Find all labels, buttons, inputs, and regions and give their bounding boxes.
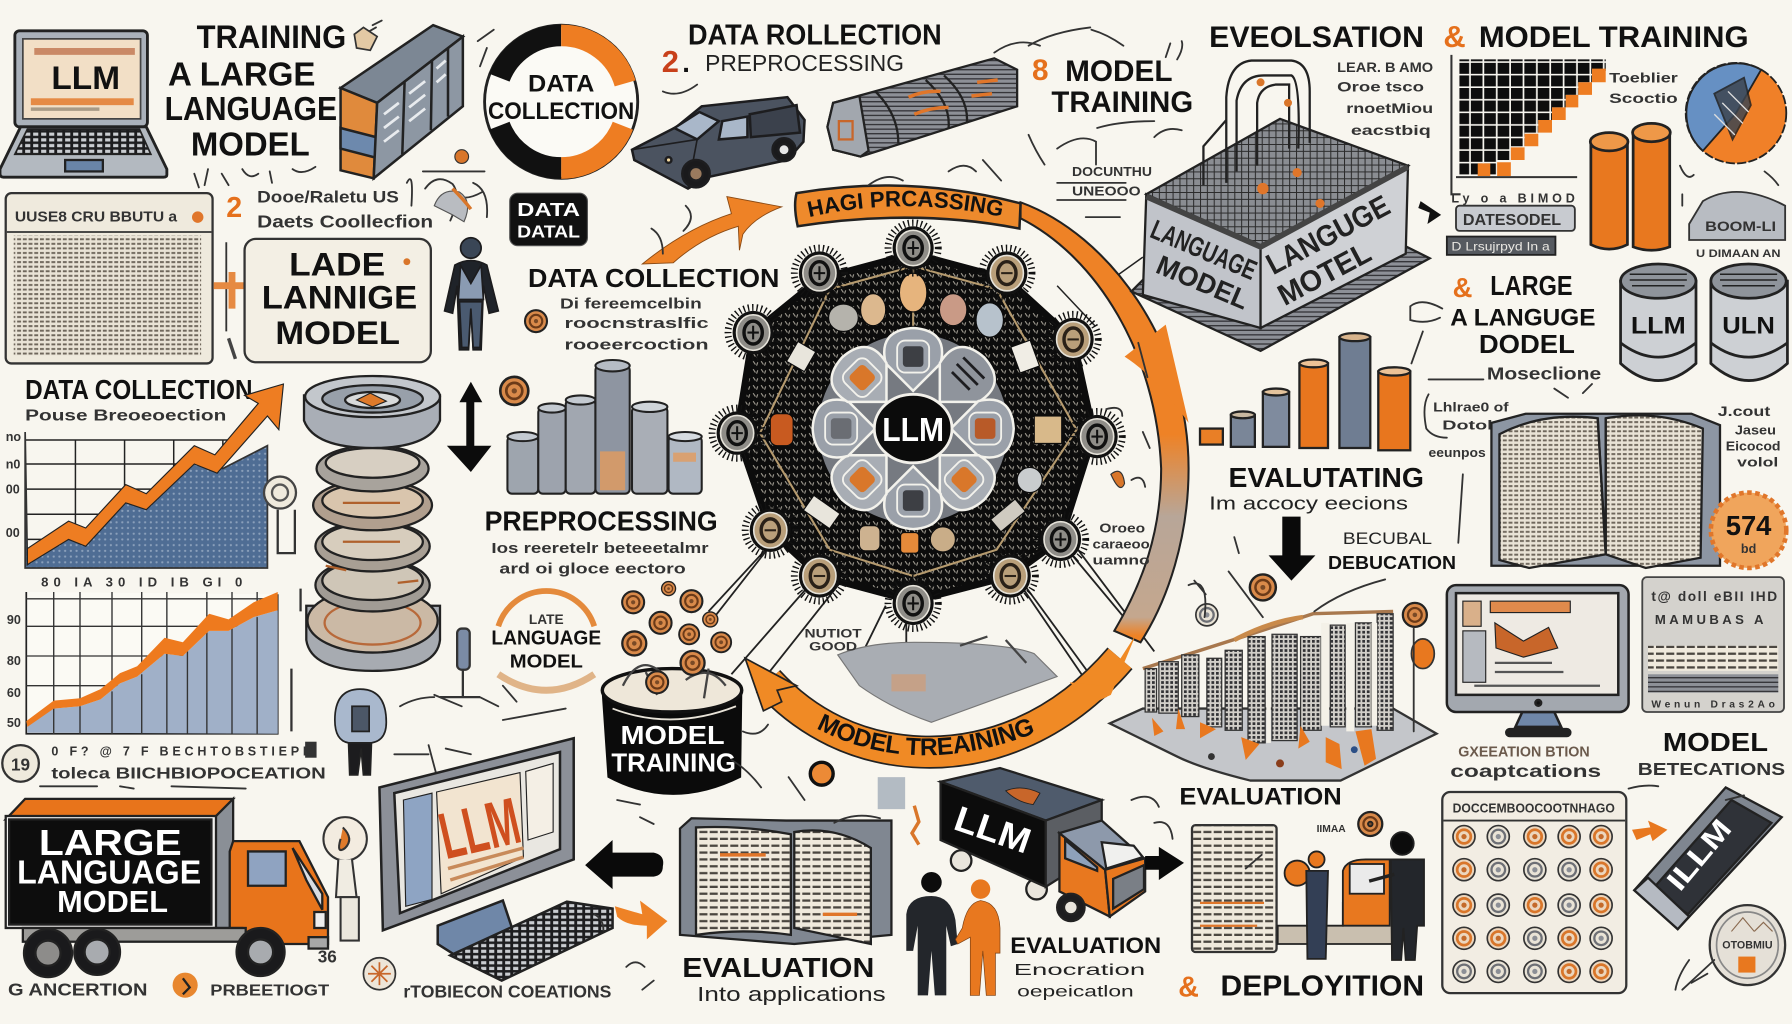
text block: model betecations (1638, 727, 1785, 779)
icon: delivery truck large language model: LARGE (39, 822, 182, 863)
icon: dark van (632, 97, 805, 189)
chart: rising bars with orange band: 80 (7, 654, 21, 668)
small scribble notes: top area: 2 (226, 192, 242, 224)
title: training a large language model: A LARGE (168, 57, 315, 94)
banner: hagi prcassing: HAGI PRCASSING (808, 190, 1002, 217)
diagram: central LLM network hub (712, 223, 1122, 629)
spoke medallions (770, 273, 1062, 553)
small scribble notes: top area (194, 21, 494, 231)
bottom-left caption row: PRBEETIOGT (210, 982, 329, 999)
panel: grey chart paper: Wenun Dras2Ao (1651, 699, 1775, 710)
scribbles: chart footnotes (2, 686, 566, 789)
chart: rising bars with orange band: 50 (7, 716, 21, 730)
heading: data collection above chart: Pouse Breoeoection (25, 408, 226, 425)
badge: round seal bottom-right: OTOBMIU (1722, 940, 1773, 952)
icon: server fence on platform (1110, 611, 1437, 781)
panel: lade lannige model box (245, 239, 431, 362)
arrow: small orange arrow to drive (1632, 821, 1667, 841)
icon: delivery truck large language model: LANGUAGE (17, 854, 201, 891)
panel: grey chart paper: t@ doll eBII IHD (1651, 589, 1777, 604)
heading: data rollection preprocessing (662, 20, 942, 79)
chart: data collection donut: COLLECTION (488, 98, 634, 125)
heading: deployition: & (1178, 972, 1199, 1004)
icon: language model machine box: LANGUGE (1261, 189, 1396, 282)
text block: evaluating: EVALUTATING (1229, 462, 1424, 493)
small note: left of open book: Dotol (1442, 418, 1493, 433)
icon: grey basin under hub (805, 627, 1057, 722)
small note: far-right book side: volol (1737, 454, 1778, 469)
small text: right of arches: eacstbiq (1351, 123, 1431, 139)
scribble decorations: ink marks across the page (594, 27, 1744, 990)
text block: preprocessing (485, 505, 718, 578)
heading: evaluation and model training: EVEOLSATION (1209, 21, 1424, 54)
network links around the hub (709, 257, 1154, 697)
chart: rising area chart with orange arrow (6, 384, 283, 589)
small text: right of arches (1337, 60, 1433, 139)
heading: data rollection preprocessing: . (682, 47, 690, 78)
icon: delivery truck large language model (6, 799, 328, 977)
small text: right of arches: rnoetMiou (1346, 101, 1433, 117)
small notes right of hub: Oroeo (1099, 521, 1145, 536)
icon: language model machine box: LANGUAGE (1146, 214, 1261, 286)
arrow: black evaluation down arrow (1269, 517, 1315, 581)
icon: workers with orange truck (1278, 812, 1424, 960)
text block: data collection centre-left (500, 263, 779, 405)
title: training a large language model: LANGUAGE (165, 91, 337, 128)
text block: large language model right: & (1453, 272, 1472, 303)
small notes right of hub: caraeoo (1093, 537, 1150, 552)
scribble decorations: ink marks across the page: UNEOOO (1072, 184, 1141, 198)
heading: evaluation and model training: & (1443, 19, 1466, 54)
small note: far-right book side (1718, 404, 1781, 469)
badge: round seal bottom-right (1675, 905, 1785, 990)
icons: orange and grey balls around fence (1194, 571, 1434, 731)
icon: grey basin under hub: NUTIOT (805, 627, 863, 641)
small notes right of hub (1093, 343, 1150, 568)
icon: magnifying lamp near monitor (323, 817, 367, 941)
small scribble notes: top area: Daets Coollecfion (257, 211, 433, 231)
arrow: black down arrow (447, 382, 491, 472)
icon: compressed data roll (827, 58, 1017, 157)
label: data tag: DATAL (517, 222, 580, 242)
panel: lade lannige model box: LADE (289, 246, 385, 282)
heading: data collection above chart: DATA COLLECTION (25, 374, 253, 405)
chart: rising bars with orange band: 60 (7, 686, 21, 700)
arrow: model training curved band: MODEL TREAINING (818, 714, 1034, 756)
title: training a large language model: MODEL (191, 126, 310, 163)
panel: laptop with LLM screen (0, 31, 167, 177)
chart: data collection donut (485, 25, 638, 178)
chart: rising area chart with orange arrow: no (6, 430, 21, 444)
heading: data rollection preprocessing: 2 (662, 44, 679, 79)
icon: open book (1491, 414, 1720, 568)
small text: chart note: Toeblier (1609, 70, 1678, 86)
title: training a large language model: TRAINING (197, 19, 346, 55)
text block: evaluating (1209, 462, 1424, 514)
chart: rising area chart with orange arrow: 80 IA 30 ID IB GI 0 (41, 574, 242, 589)
label: data tag (510, 193, 587, 246)
icon: magnifier (264, 477, 296, 553)
icon: language model machine box: MODEL (1152, 249, 1253, 315)
icon: lab pedestal (291, 589, 480, 757)
text block: becubal debucation: BECUBAL (1343, 529, 1432, 548)
text block: evaluation into applications (682, 952, 886, 1006)
panel: coin calendar grid (1442, 792, 1626, 993)
small text: right of arches: Oroe tsco (1337, 79, 1424, 95)
icon: small archive house (1680, 166, 1785, 260)
arrow: model training curved band (744, 638, 1134, 769)
label: language model circle: LATE (529, 612, 564, 627)
text block: evaluation enocration: Enocration (1014, 962, 1145, 979)
text block: evaluation enocration (1010, 933, 1161, 1001)
small note: left of open book (1424, 394, 1509, 543)
icon: bucket with coins: MODEL (621, 720, 725, 750)
text block: large language model right (1410, 270, 1601, 398)
text block: becubal debucation (1328, 529, 1456, 573)
text block: coaptcations caption: GXEEATION BTION (1458, 745, 1590, 761)
label: language model circle: MODEL (510, 650, 583, 671)
panel: grey chart paper (1642, 577, 1784, 712)
chart: rising area chart with orange arrow: 00 (6, 526, 20, 540)
chart: blue orange pie gear (1686, 63, 1786, 163)
icon: small archive house: U DIMAAN AN (1696, 248, 1781, 260)
connector: window to model box (214, 242, 246, 359)
icon: stacked model books (1418, 201, 1575, 255)
text block: data collection centre-left: rooeercoction (565, 338, 709, 354)
panel: laptop with LLM screen: LLM (51, 60, 120, 96)
bottom-left caption row (8, 946, 611, 1002)
icon: small archive house: BOOM-LI (1705, 219, 1776, 235)
badge: orange seal: 574 (1726, 510, 1772, 541)
small text: chart note: Scoctio (1609, 91, 1678, 107)
chart: orange cylinders (1590, 123, 1670, 250)
icon: person in overalls (445, 238, 498, 350)
text block: data collection centre-left: roocnstraslfic (565, 316, 709, 332)
chart: data collection donut: DATA (528, 70, 594, 97)
icon: LLM delivery truck: LLM (949, 798, 1036, 861)
icon: desktop monitor (1447, 585, 1629, 736)
heading: model training step: TRAINING (1051, 86, 1193, 119)
chart: rising area chart with orange arrow: 00 (6, 483, 20, 497)
icon: workers with orange truck: IIMAA (1317, 824, 1346, 835)
heading: data rollection preprocessing: DATA ROLLECTION (688, 20, 942, 52)
icon: LLM cans: LLM (1631, 313, 1686, 340)
text block: preprocessing: ard oi gloce eectoro (499, 562, 686, 578)
scribble decorations: ink marks across the page: DOCUNTHU (1072, 165, 1152, 179)
icon: language model machine box (1131, 61, 1430, 351)
icon: isometric data block (341, 25, 463, 178)
text block: large language model right: LARGE (1490, 270, 1573, 301)
heading: evaluation lower centre: EVALUATION (1179, 784, 1342, 811)
small note: far-right book side: J.cout (1718, 404, 1771, 419)
small notes right of hub: uamno (1093, 553, 1150, 568)
bottom-left caption row: 36 (318, 946, 337, 966)
title: training a large language model (165, 19, 346, 163)
small note: far-right book side: Jaseu (1735, 422, 1776, 437)
small text: chart note (1609, 70, 1678, 107)
panel: grey chart paper: MAMUBAS A (1655, 612, 1764, 627)
small note: left of open book: eeunpos (1429, 445, 1486, 460)
panel: lade lannige model box: MODEL (275, 315, 400, 351)
scribbles: chart footnotes: 19 (11, 754, 30, 774)
small scribble notes: top area: Dooe/Raletu US (257, 187, 399, 206)
panel: document (1192, 825, 1277, 952)
network strands (760, 248, 1077, 576)
text block: data collection centre-left: Di fereemcelbin (560, 297, 702, 313)
banner: hagi prcassing (794, 184, 1022, 230)
text block: model betecations: BETECATIONS (1638, 759, 1785, 779)
text block: evaluation enocration: EVALUATION (1010, 933, 1161, 958)
heading: deployition: DEPLOYITION (1221, 970, 1424, 1002)
text block: evaluation into applications: EVALUATION (682, 952, 874, 983)
chart: rising bars with orange band: 90 (7, 613, 21, 627)
panel: coin calendar grid: DOCCEMBOOCOOTNHAGO (1453, 802, 1615, 816)
chart: grey data cylinders (507, 360, 702, 494)
text block: data collection centre-left: DATA COLLECTION (528, 263, 779, 293)
icon: stacked model books: DATESODEL (1463, 212, 1561, 229)
chart: staircase grid: Ly o a BIMOD (1451, 191, 1575, 205)
icon: LLM delivery truck (941, 768, 1145, 921)
arrow: upper-left orange arrow into banner (642, 197, 782, 264)
text block: evaluating: Im accocy eecions (1209, 493, 1408, 514)
text block: becubal debucation: DEBUCATION (1328, 552, 1456, 573)
text block: preprocessing: Ios reeretelr beteeetalmr (491, 541, 709, 557)
heading: model training step: MODEL (1065, 55, 1173, 88)
icon: LLM usb drive: ILLM (1661, 813, 1738, 897)
heading: data rollection preprocessing: PREPROCESSING (705, 50, 904, 76)
icon: bucket with coins: TRAINING (611, 747, 736, 777)
icon: stacked model books: D Lrsujrpyd In a (1451, 239, 1550, 253)
panel: lade lannige model box: LANNIGE (262, 280, 417, 316)
arrow: black left arrow (585, 840, 663, 889)
icon: language model machine box: MOTEL (1272, 236, 1377, 312)
icon: delivery truck large language model: MODEL (57, 884, 168, 919)
heading: evaluation and model training (1209, 19, 1749, 54)
badge: orange seal (1711, 493, 1786, 568)
icon: monitor showing LLM: LLM (433, 785, 527, 874)
label: data tag: DATA (517, 199, 580, 220)
icon: bucket with coins (602, 582, 742, 794)
icon: open book bottom (680, 818, 891, 944)
label: language model circle: LANGUAGE (491, 628, 601, 650)
icon: LLM usb drive (1634, 787, 1782, 929)
panel: browser text window: UUSE8 CRU BBUTU a (15, 210, 178, 226)
chart: evaluation bars (1200, 333, 1410, 450)
label: language model circle (491, 591, 601, 690)
icon: LLM cans: ULN (1722, 313, 1775, 340)
panel: browser text window (6, 193, 213, 363)
chart: rising area chart with orange arrow: n0 (6, 458, 20, 472)
text block: large language model right: Moseclione (1487, 363, 1601, 383)
heading: data collection above chart (25, 374, 253, 425)
heading: model training step: 8 (1032, 54, 1049, 87)
icon: grey basin under hub: GOOD (809, 639, 858, 653)
small text: right of arches: LEAR. B AMO (1337, 60, 1433, 75)
icon: LLM cans (1621, 264, 1787, 381)
arrow: small orange right arrow (615, 901, 667, 939)
icon: two people (906, 872, 1000, 995)
text block: evaluation into applications: Into applications (697, 983, 886, 1006)
scribbles: chart footnotes: toleca BIICHBIOPOCEATION (51, 765, 326, 782)
bottom-left caption row: G ANCERTION (8, 979, 147, 999)
badge: orange seal: bd (1741, 542, 1756, 556)
arrow: small black right arrow by truck (1145, 847, 1184, 880)
text block: coaptcations caption (1450, 745, 1601, 781)
text block: coaptcations caption: coaptcations (1450, 761, 1601, 781)
scribbles: chart footnotes: 0 F? @ 7 F BECHTOBSTIEPR (51, 744, 312, 758)
text block: preprocessing: PREPROCESSING (485, 505, 718, 536)
text block: large language model right: DODEL (1479, 329, 1575, 359)
small note: left of open book: Lhlrae0 of (1433, 399, 1509, 414)
perimeter nodes (712, 223, 1122, 629)
icon: small person in blue (335, 689, 386, 775)
arrow: big orange cycle arc (1021, 202, 1189, 642)
inner flower: LLM (882, 412, 944, 449)
small note: far-right book side: Eicocod (1726, 438, 1781, 453)
text block: evaluation enocration: oepeicatlon (1017, 984, 1134, 1001)
icon: stack of disks (304, 376, 440, 671)
bottom-left caption row: rTOBIECON COEATIONS (403, 982, 611, 1002)
heading: evaluation and model training: MODEL TRAINING (1479, 21, 1749, 54)
chart: staircase grid (1451, 55, 1606, 205)
heading: model training step (1032, 54, 1193, 119)
chart: rising bars with orange band (7, 592, 278, 734)
text block: large language model right: A LANGUGE (1450, 305, 1595, 332)
text block: model betecations: MODEL (1663, 727, 1768, 757)
icon: monitor showing LLM (379, 738, 613, 981)
inner flower (813, 328, 1014, 529)
